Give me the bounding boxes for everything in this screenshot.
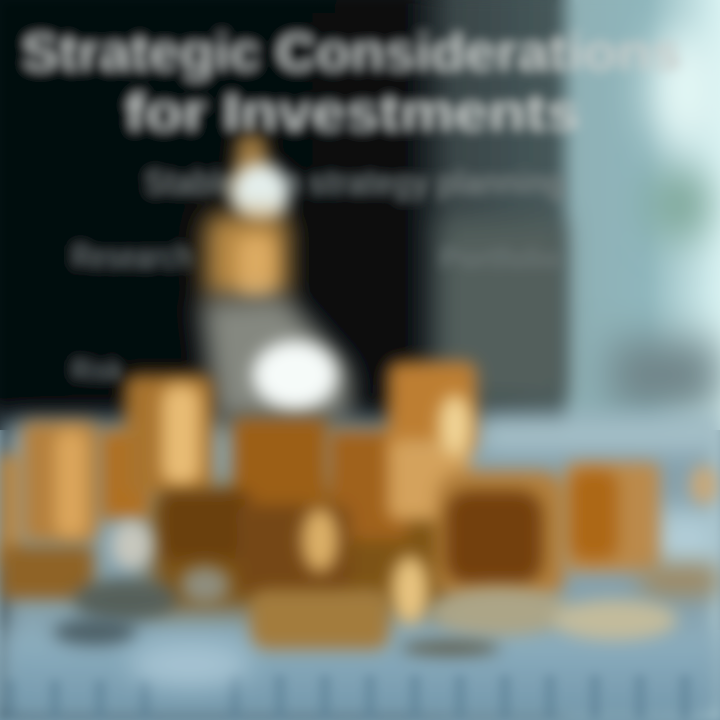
subtitle: Stablecoin strategy planning bbox=[145, 164, 565, 202]
icon: bottle stack bbox=[200, 135, 350, 420]
icon: light highlights on fabric bbox=[130, 643, 250, 687]
title: Strategic Considerations bbox=[22, 24, 682, 82]
title bbox=[22, 24, 682, 142]
icon: scattered silver and pale coins bbox=[53, 521, 677, 656]
icon: coin stacks bbox=[0, 362, 720, 650]
text block: list lines bbox=[72, 238, 560, 387]
text block: list lines: Portfolio bbox=[440, 242, 560, 275]
title: for Investments bbox=[125, 84, 580, 142]
panel: ribbed blue fabric bbox=[10, 675, 685, 720]
panel: pale table surface bbox=[0, 420, 720, 720]
text block: list lines: Research bbox=[72, 238, 192, 276]
text block: list lines: Risk bbox=[72, 354, 122, 387]
